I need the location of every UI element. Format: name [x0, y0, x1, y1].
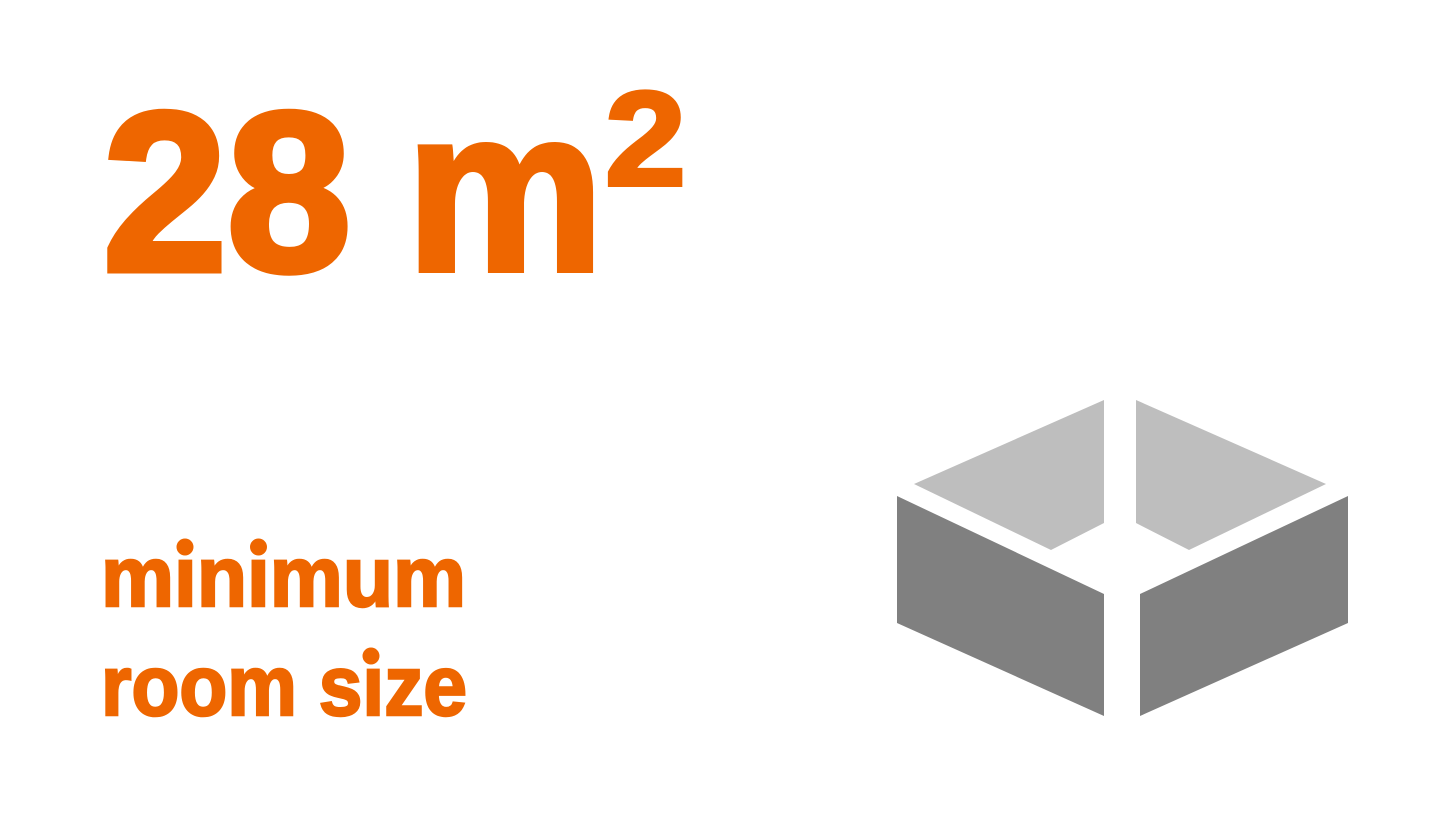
unit m: m	[406, 61, 604, 320]
number 28: 28	[103, 65, 351, 318]
label line 1: minimum	[101, 530, 466, 625]
icon: open box	[897, 400, 1348, 716]
box side front right	[1140, 496, 1348, 716]
box flap back right	[1136, 400, 1326, 550]
label line 2: room size	[101, 639, 467, 734]
superscript 2: 2	[605, 65, 686, 214]
heading: 28 m²	[103, 61, 686, 320]
box side front left	[897, 496, 1104, 716]
label: minimum room size	[101, 530, 467, 734]
box flap back left	[914, 400, 1104, 550]
